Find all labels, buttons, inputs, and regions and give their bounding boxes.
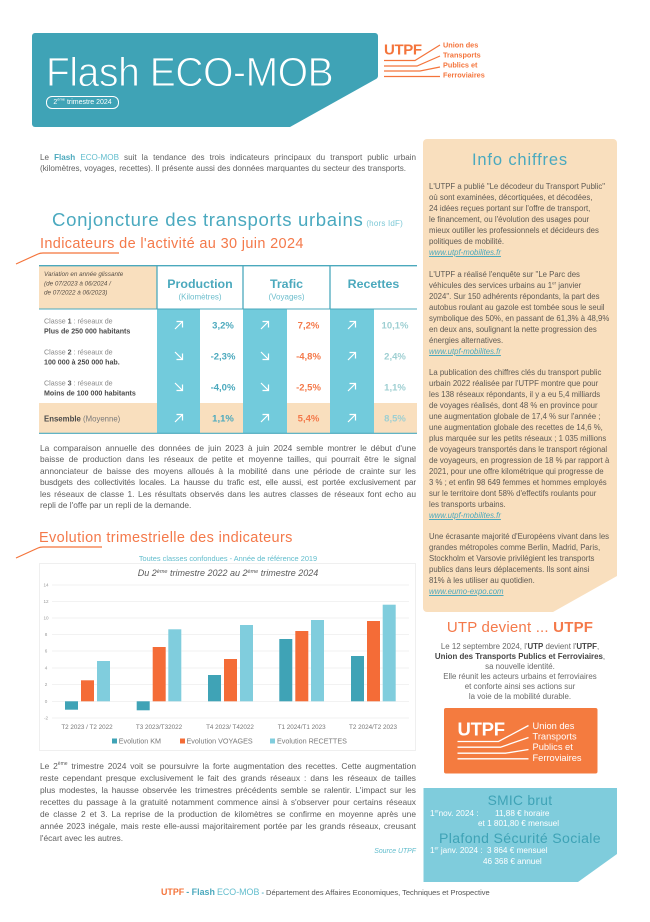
logo: UTPF header: Ferroviaires [443,70,485,80]
text: chiffres clés: plus marquée sur les petits réseaux ; 1 035 millions [429,434,606,443]
y axis: 10 [43,616,49,620]
paragraph: quarterly analysis: l'écart avec les autres. [40,833,123,843]
SMIC values [430,808,559,828]
series: recettes [97,605,396,701]
table values: -4,0% [211,382,236,394]
row labels: 100 000 à 250 000 hab. [44,358,120,366]
category labels: T2 2023 / T2 2022 [61,724,113,731]
logo: UTPF box: Ferroviaires [532,752,581,762]
category labels: T1 2024/T1 2023 [278,724,326,731]
chart title: ème [157,569,167,575]
column headers: Production [167,277,233,291]
logo: UTPF box: Transports [532,731,576,741]
logo: UTPF header: Transports [443,50,481,60]
heading: UTP devient: UTP devient ... UTPF [447,619,593,636]
text: décodeur: L'UTPF a publié "Le décodeur du Transport Public" [429,182,605,191]
chart title: Du 2 [138,568,157,578]
logo: UTPF box: UTPF [457,718,504,739]
logo: UTPF header [384,40,485,80]
table values: 1,1% [212,414,234,424]
source: Source UTPF [374,848,416,855]
intro text: (kilomètres, voyages, recettes). Il présente aussi des données marquantes du secteur des transports. [40,164,406,173]
text: chiffres clés: de voyageurs transportés dans le transport régional [429,445,607,454]
text: enquête parc: 2024". Sur 150 adhérents répondants, la part des [429,292,600,301]
category labels: T2 2024/T2 2023 [349,724,397,731]
paragraph: annual comparison: busdgets des collectivités locales. La hausse du trafic est, elle aussi, est portée exclusivement par [40,477,416,487]
text: européens: grandes métropoles comme Berlin, Madrid, Paris, [429,543,600,552]
header banner [32,33,378,127]
text: enquête parc: énergies alternatives. [429,336,503,345]
heading: Info chiffres: Info chiffres [472,151,568,169]
text: UTP devient: sa nouvelle identité. [485,662,555,671]
chart subtitle: Toutes classes confondues - Année de référence 2019 [139,554,317,563]
y axis: 12 [43,599,49,604]
text: chiffres clés: de voyages réalisés, dont 48 % en province pour [429,401,598,410]
panel: SMIC [424,788,617,882]
y axis: 0 [45,699,48,704]
y axis: -2 [44,716,48,720]
chart title: ème [248,569,258,575]
text: décodeur: politiques de mobilité. [429,237,504,246]
text: décodeur: mieux outiller les professionnels et décideurs des [429,226,599,235]
text: enquête parc: autobus roulant au gazole est tombée sous le seuil [429,303,605,312]
heading: Plafond Sécurité Sociale: Plafond Sécurité Sociale [439,830,601,846]
text: enquête parc: L'UTPF a réalisé l'enquête sur "Le Parc des [429,270,580,279]
paragraph: annual comparison: baisse de production dans les réseaux de petite et moyenne tailles, qui pourrait être le signal [40,454,416,464]
text: chiffres clés: une augmentation globale des recettes de 14,6 %, [429,423,603,432]
text: enquête parc: véhicules des services urbains au 1er janvier [429,280,581,290]
table header note: (de 07/2023 à 06/2024 / [44,280,112,288]
y axis [43,582,49,720]
text: chiffres clés: les transports urbains. [429,500,506,509]
text: décodeur: 24 idées reçues portant sur l'offre de transport, [429,204,590,213]
legend: Evolution RECETTES [277,737,347,746]
bar chart [39,563,416,751]
paragraph: annual comparison: les réseaux de classe 1. Les résultats observés dans les autres classes de réseaux font echo au [40,489,416,499]
paragraph: quarterly analysis: reste cependant presque exclusivement le fait des grands réseaux : dans les réseaux de tailles [40,773,416,783]
text: décodeur [429,182,605,257]
text: chiffres clés: 3 % ; et enfin 98 649 femmes et hommes employés [429,478,607,487]
text: chiffres clés: sur le territoire dont 58% d'effectifs roulants pour [429,489,596,498]
text: UTP devient: Union des Transports Publics et Ferroviaires, [435,652,605,661]
paragraph: annual comparison: La comparaison annuelle des données de juin 2023 à juin 2024 semble montrer le début d'une [40,443,416,453]
y axis: 2 [45,682,48,687]
row labels: Ensemble (Moyenne) [44,414,121,424]
text: décodeur: www.utpf-mobilites.fr [429,248,501,257]
series: voyages [81,621,380,701]
logo: UTPF box: Publics et [532,742,573,752]
SMIC values: 11,88 € horaire [495,808,549,818]
table values: 10,1% [382,320,409,332]
chart title: trimestre 2022 au 2 [167,568,248,578]
table values [211,320,409,424]
section heading: Indicateurs: Indicateurs de l'activité au 30 juin 2024 [40,236,304,252]
text: chiffres clés: une augmentation globale de 17,4 % sur l'année ; [429,412,600,421]
table values: -2,3% [211,352,236,362]
quarter badge [46,96,119,109]
plafond values [430,845,548,866]
text: UTP devient: la voie de la mobilité durable. [469,692,571,701]
heading: SMIC brut: SMIC brut [488,793,552,808]
paragraph: quarterly analysis: de classe 2 et 3. La reprise de la production de kilomètres se confirme en moyenne après une [40,809,416,819]
legend [112,737,347,746]
text: décodeur: où sont examinées, décortiquées, et décodées, [429,193,592,202]
text: chiffres clés: urbain 2022 réalisée par l'UTPF montre que pour [429,379,598,388]
logo: UTPF box: Union des [532,720,574,730]
text: européens: Une écrasante majorité d'Européens vivant dans les [429,532,609,541]
logo: UTPF box [444,708,598,774]
text: européens [429,532,609,596]
row labels: Plus de 250 000 habitants [44,328,130,336]
column headers: Trafic [270,277,303,291]
text: européens: 81% à les utiliser au quotidien. [429,576,535,585]
text: enquête parc: symbolique des 50%, en passant de 61,3% à 48,9% [429,314,609,323]
paragraph: annual comparison: repli de l'offe par un repli de la demande. [40,500,191,510]
y axis: 4 [45,666,48,670]
text: décodeur: le financement, ou l'évolution des usages pour [429,215,589,224]
text: enquête parc: en deux ans, soulignant la nette progression des [429,325,597,334]
intro text: Le Flash ECO-MOB suit la tendance des trois indicateurs principaux du transport public urbain [40,153,416,162]
row labels: Classe 3 : réseaux de [44,380,113,388]
table values: 8,5% [384,414,406,424]
category labels: T4 2023/ T42022 [206,724,254,731]
paragraph: quarterly analysis: plus modestes, la hausse observée les trimestres précédents semble se ralentir. L'impact sur les [40,785,416,795]
footer: UTPF - Flash ECO-MOB - Département des Affaires Economiques, Techniques et Prospective [161,887,490,897]
text: chiffres clés [429,368,610,520]
column headers: (Voyages) [268,292,305,302]
SMIC values: 1ernov. 2024 : [430,808,478,818]
panel: info chiffres background [423,139,617,612]
plafond values: 1er janv. 2024 : [430,845,483,854]
text: UTP devient: Elle réunit les acteurs urbains et ferroviaires [443,672,597,681]
table values: 2,4% [384,352,406,362]
SMIC values: et 1 801,80 € mensuel [478,819,559,828]
column headers: Recettes [348,277,399,291]
section heading: Conjoncture: Conjoncture des transports urbains (hors IdF) [52,209,403,230]
logo: UTPF header: UTPF [384,42,422,58]
text: enquête parc: www.utpf-mobilites.fr [429,347,501,356]
column headers [167,277,399,302]
category labels: T3 2023/T32022 [136,724,183,731]
table values: 7,2% [298,320,320,332]
text: UTP devient: Le 12 septembre 2024, l'UTP devient l'UTPF, [441,642,599,651]
row labels: Classe 2 : réseaux de [44,348,113,356]
paragraph: quarterly analysis [40,761,416,843]
table header note [39,266,156,309]
y axis: 6 [45,648,48,654]
table values: -2,5% [296,382,321,394]
row labels: Moins de 100 000 habitants [44,390,136,398]
paragraph: quarterly analysis: Le 2ème trimestre 2024 voit se poursuivre la forte augmentation des recettes. Cette augmentation [40,761,416,771]
quarter badge: 2ème trimestre 2024 [53,97,112,106]
text: chiffres clés: www.utpf-mobilites.fr [429,511,501,520]
text: enquête parc [429,270,609,356]
category labels [61,724,397,731]
table values: 3,2% [212,320,234,332]
series: KM [65,639,364,710]
chart title: trimestre 2024 [258,568,318,578]
section heading: Evolution: Evolution trimestrielle des indicateurs [39,530,293,546]
logo: UTPF header: Publics et [443,60,478,70]
table values: 5,4% [298,414,320,424]
text: chiffres clés: La publication des chiffres clés du transport public [429,368,601,377]
intro text [40,153,416,173]
trend arrows [175,322,356,422]
paragraph: quarterly analysis: année 2023 inégale, mais reste elle-aussi majoritairement portée par les grands réseaux, creusant [40,821,416,831]
y axis: 8 [45,632,48,637]
text: chiffres clés: 2021, pour une offre kilométrique qui progresse de [429,467,604,476]
text: européens: publics dans leurs déplacements. Ils sont ainsi [429,565,589,574]
legend: Evolution VOYAGES [186,737,253,746]
paragraph: quarterly analysis: recettes du passage à la gratuité notamment commence ainsi à s'observer pour certains réseaux [40,797,416,807]
table: indicators [39,265,417,434]
table header note: Variation en année glissante [44,271,124,278]
plafond values: 3 864 € mensuel [487,846,548,854]
row labels: Classe 1 : réseaux de [44,318,113,326]
row labels [44,318,136,424]
text: européens: www.eumo-expo.com [429,587,504,596]
title: Flash ECO-MOB [46,49,333,95]
logo: UTPF header: Union des [443,40,478,50]
table values: 1,1% [384,382,406,394]
paragraph: annual comparison: annonciateur de baisse des moyens alloués à la mobilité dans une période de crainte sur les [40,466,416,476]
text: UTP devient [435,642,605,701]
y axis: 14 [43,582,49,588]
table header note: de 07/2022 à 06/2023) [44,290,107,296]
text: UTP devient: et conforte ainsi ses actions sur [465,682,575,691]
legend: Evolution KM [119,737,161,746]
text: chiffres clés: les 138 réseaux répondants, il y a eu 5,4 milliards [429,390,600,399]
paragraph: annual comparison [40,443,416,510]
text: européens: Stockholm et Varsovie privilégient les transports [429,554,594,563]
column headers: (Kilomètres) [178,292,222,302]
text: chiffres clés: de voyageurs, en progression de 18 % par rapport à [429,456,609,465]
table values: -4,8% [296,352,321,362]
plafond values: 46 368 € annuel [483,856,542,866]
